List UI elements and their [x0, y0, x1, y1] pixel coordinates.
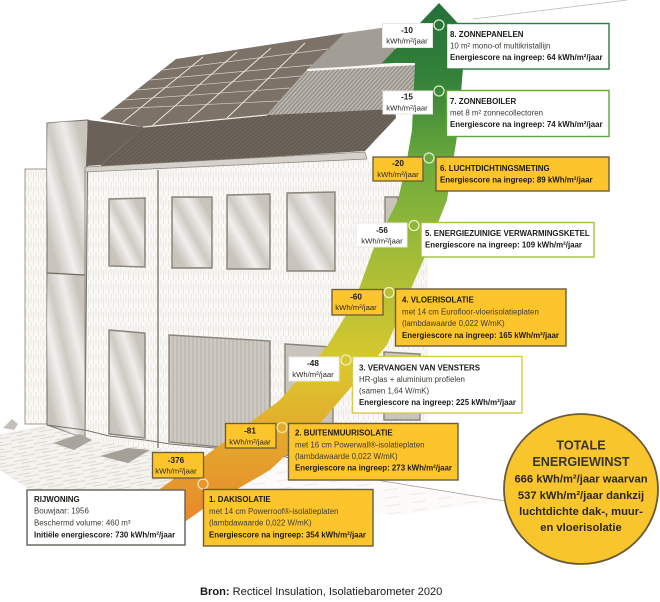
saving label: [373, 157, 423, 181]
upper gray panel: [307, 26, 395, 70]
starting point box: rijwoning: RIJWONING: [34, 495, 80, 504]
description box: [288, 424, 458, 480]
saving label: kWh/m²/jaar: [386, 36, 428, 45]
saving label: [289, 357, 339, 381]
step 8: zonnepanelen: [382, 20, 609, 69]
step 3: vensters: [289, 355, 522, 413]
saving label: kWh/m²/jaar: [229, 438, 271, 446]
faint right ground: [160, 460, 505, 515]
solar panels: [100, 33, 345, 127]
description box: met 8 m² zonnecollectoren: [450, 108, 543, 118]
ground: [0, 424, 230, 490]
saving label: kWh/m²/jaar: [361, 236, 403, 246]
saving label: -10: [401, 26, 413, 35]
starting point box: rijwoning: [27, 490, 185, 545]
description box: (samen 1,64 W/mK): [359, 386, 430, 396]
step marker: [341, 355, 351, 365]
saving label: [356, 223, 407, 247]
description box: met 16 cm Powerwall®-isolatieplaten: [295, 440, 424, 450]
step 6: luchtdichtingsmeting: [373, 153, 609, 191]
step marker: [434, 20, 444, 30]
description box: [204, 490, 373, 546]
saving label: -376: [168, 456, 185, 465]
lower windows and garage: [109, 330, 420, 460]
column line: [157, 170, 159, 448]
step 2: buitenmuurisolatie: [226, 422, 458, 480]
solar boiler: [267, 63, 416, 115]
total energy gain circle: ENERGIEWINST: [532, 455, 630, 469]
description box: [436, 157, 609, 191]
total energy gain circle: en vloerisolatie: [540, 522, 622, 534]
description box: 7. ZONNEBOILER: [450, 97, 517, 106]
step marker: [277, 422, 287, 432]
step 1: dakisolatie: [152, 452, 373, 546]
door thresholds: [47, 425, 377, 480]
description box: (lambdawaarde 0,022 W/mK): [209, 519, 312, 528]
total energy gain circle: [504, 414, 658, 564]
description box: 10 m² mono-of multikristallijn: [450, 42, 550, 50]
description box: 3. VERVANGEN VAN VENSTERS: [359, 363, 480, 372]
lower roof: [101, 108, 396, 167]
step 4: vloerisolatie: [332, 288, 566, 346]
source line: Bron: Recticel Insulation, Isolatiebarometer 2020: [200, 586, 442, 598]
description box: Energiescore na ingreep: 165 kWh/m²/jaar: [402, 331, 559, 340]
description box: 1. DAKISOLATIE: [209, 495, 271, 504]
description box: HR-glas + aluminium profielen: [359, 375, 465, 384]
saving label: kWh/m²/jaar: [155, 467, 197, 476]
description box: Energiescore na ingreep: 273 kWh/m²/jaar: [295, 464, 452, 472]
total energy gain circle: luchtdichte dak-, muur-: [519, 506, 643, 518]
description box: (lambdawaarde 0,022 W/mK): [295, 452, 398, 461]
description box: (lambdawaarde 0,022 W/mK): [402, 319, 505, 328]
saving label: -81: [244, 426, 256, 436]
description box: 6. LUCHTDICHTINGSMETING: [440, 164, 550, 173]
step marker: [198, 479, 208, 489]
step marker: [409, 220, 419, 230]
total energy gain circle: 666 kWh/m²/jaar waarvan: [514, 474, 648, 486]
saving label: [382, 24, 432, 48]
step 7: zonneboiler: [383, 86, 609, 136]
description box: Energiescore na ingreep: 74 kWh/m²/jaar: [450, 120, 603, 129]
lower window streak: [110, 331, 144, 437]
description box: [421, 222, 594, 257]
saving label: -60: [350, 292, 362, 301]
description box: Energiescore na ingreep: 89 kWh/m²/jaar: [440, 176, 593, 185]
step marker: [384, 288, 394, 298]
saving label: -20: [392, 159, 404, 168]
upper window streaks: [110, 193, 334, 270]
boiler white stripe: [307, 64, 416, 70]
description box: 5. ENERGIEZUINIGE VERWARMINGSKETEL: [425, 229, 590, 238]
description box: Energiescore na ingreep: 64 kWh/m²/jaar: [450, 53, 603, 62]
description box: [446, 90, 609, 136]
side wall ledge: [47, 273, 85, 275]
total energy gain circle: 537 kWh/m²/jaar dankzij: [518, 490, 644, 502]
total energy gain circle: TOTALE: [556, 438, 606, 452]
upper windows: [109, 192, 398, 271]
saving label: -48: [307, 359, 319, 368]
step marker: [434, 86, 444, 96]
starting point box: rijwoning: Initiële energiescore: 730 kWh/m²/jaar: [34, 530, 175, 540]
description box: [446, 24, 609, 69]
saving label: kWh/m²/jaar: [386, 104, 428, 112]
saving label: kWh/m²/jaar: [335, 303, 377, 312]
description box: 8. ZONNEPANELEN: [450, 30, 524, 39]
description box: Energiescore na ingreep: 225 kWh/m²/jaar: [359, 398, 516, 407]
starting point box: rijwoning: Bouwjaar: 1956: [34, 506, 89, 516]
description box: met 14 cm Powerroof®-isolatieplaten: [209, 507, 338, 516]
description box: Energiescore na ingreep: 354 kWh/m²/jaar: [209, 530, 366, 540]
starting point box: rijwoning: Beschermd volume: 460 m³: [34, 518, 131, 528]
description box: Energiescore na ingreep: 109 kWh/m²/jaar: [425, 240, 582, 250]
description box: 4. VLOERISOLATIE: [402, 296, 474, 304]
eave band: [85, 152, 367, 172]
step marker: [424, 153, 434, 163]
description box: met 14 cm Eurofloor-vloerisolatieplaten: [402, 308, 539, 316]
dark wedge: [86, 120, 143, 166]
plant patches: [53, 434, 92, 450]
saving label: [226, 424, 276, 448]
step 5: verwarmingsketel: [356, 220, 594, 257]
saving label: kWh/m²/jaar: [377, 170, 419, 179]
description box: [396, 289, 566, 346]
ridge line: [473, 0, 627, 19]
description box: 2. BUITENMUURISOLATIE: [295, 428, 393, 438]
saving label: [332, 290, 383, 315]
saving label: [152, 452, 204, 478]
front wall: [85, 158, 428, 478]
saving label: [383, 91, 432, 114]
saving label: -15: [401, 92, 413, 102]
saving label: kWh/m²/jaar: [292, 370, 334, 379]
description box: [352, 356, 522, 413]
side wall: [47, 120, 88, 438]
progress arrow: [160, 3, 495, 521]
faint ground line: [377, 480, 505, 501]
narrow left column: [25, 169, 49, 424]
saving label: -56: [376, 226, 388, 235]
